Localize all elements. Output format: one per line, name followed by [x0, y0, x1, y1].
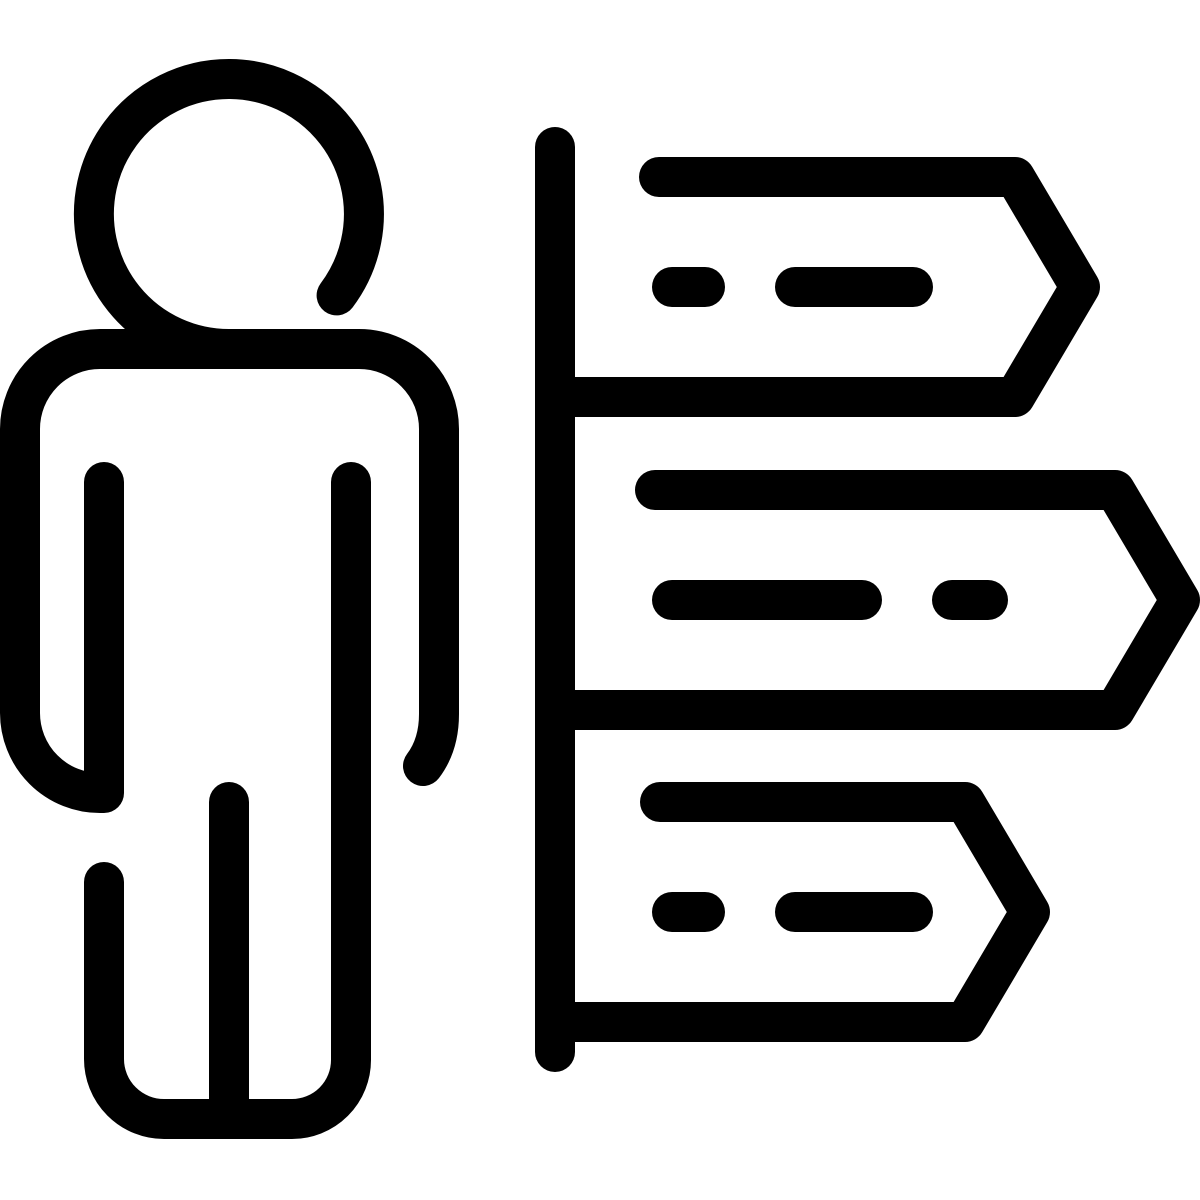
leg divider [209, 802, 249, 1119]
signpost pole [535, 147, 575, 1052]
person head [94, 79, 364, 349]
sign: middle [555, 490, 1180, 710]
sign: top [555, 177, 1080, 397]
icon: person [20, 79, 439, 1119]
sign: bottom [555, 802, 1030, 1022]
person torso and arms [20, 349, 439, 793]
person legs [104, 482, 351, 1119]
